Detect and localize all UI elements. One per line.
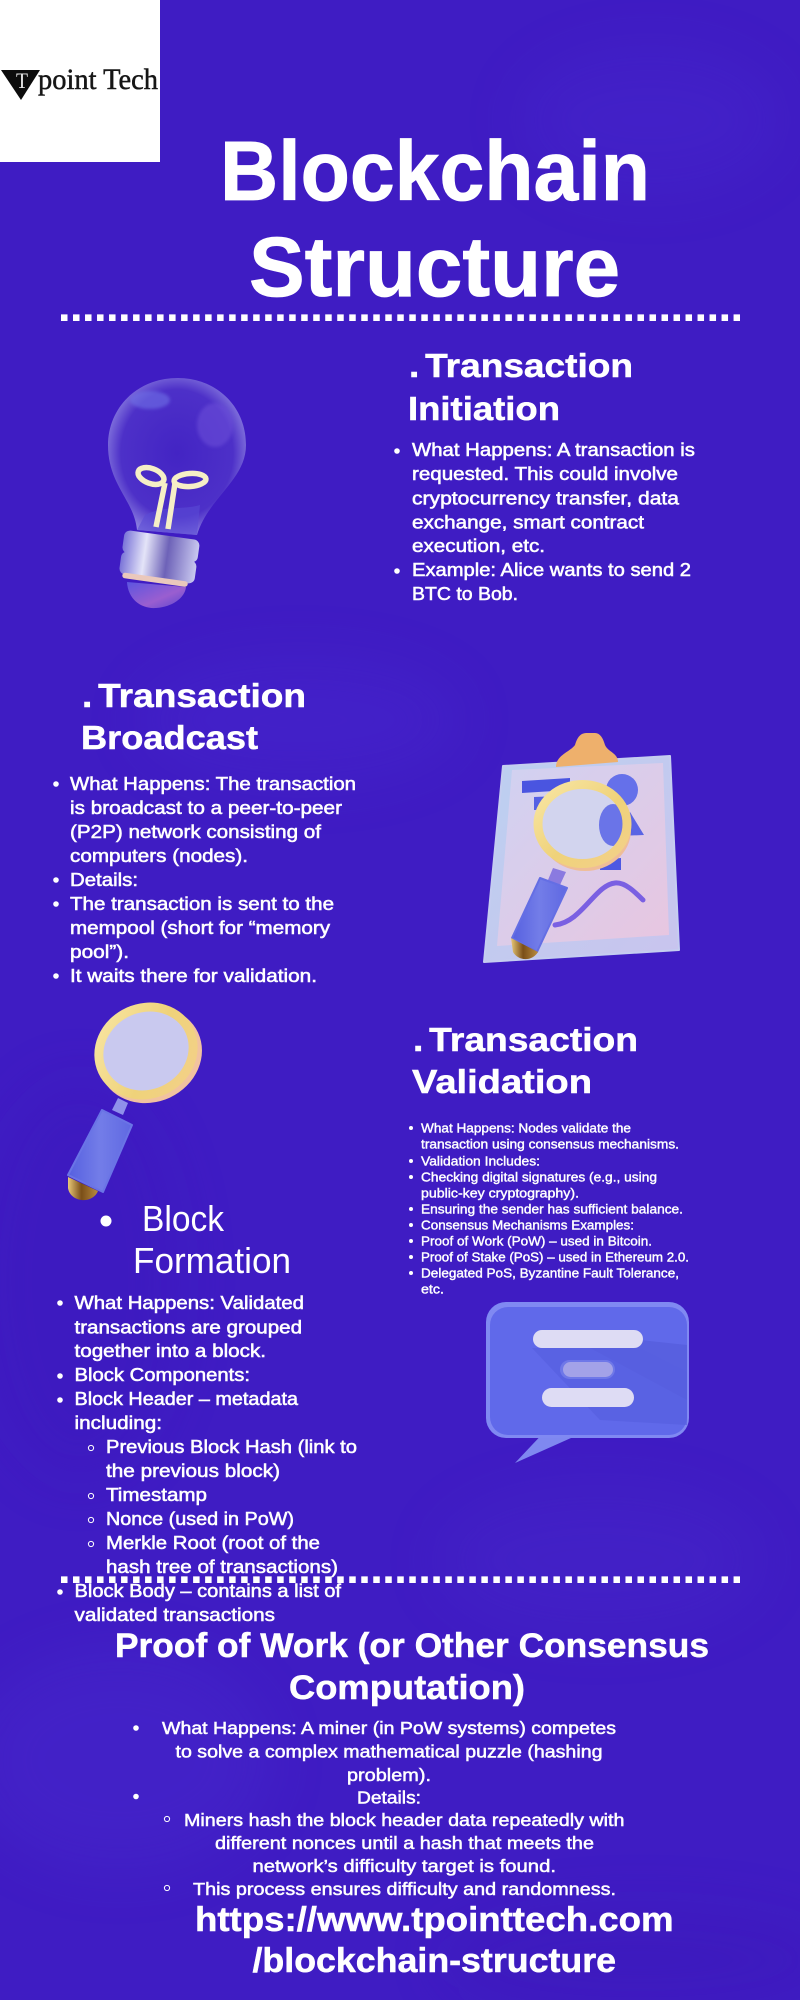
source url: /blockchain-structure (252, 1942, 616, 1980)
bullet list: BTC to Bob. (412, 583, 518, 604)
source url (195, 1901, 674, 1980)
heading: Proof of Work (or Other Consensus (115, 1627, 709, 1665)
bullet list: requested. This could involve (412, 463, 678, 484)
bullet list: The transaction is sent to the (70, 893, 334, 914)
bullet list: problem). (347, 1765, 431, 1785)
bullet list: Delegated PoS, Byzantine Fault Tolerance, (421, 1266, 679, 1280)
panel: proof of work (115, 1627, 709, 1899)
bullet list (133, 1718, 624, 1899)
title: Structure (249, 220, 620, 314)
panel: block formation (57, 1198, 357, 1625)
heading: Broadcast (81, 719, 258, 756)
bullet list: What Happens: Nodes validate the (421, 1120, 631, 1136)
bullet list: Details: (357, 1788, 421, 1808)
panel: transaction validation (409, 1021, 689, 1296)
heading (100, 1198, 291, 1281)
bullet list: Block Header – metadata (74, 1388, 299, 1409)
panel: transaction initiation (394, 347, 695, 604)
heading: Formation (133, 1240, 291, 1281)
heading: . Transaction (413, 1021, 638, 1058)
bullet list: What Happens: The transaction (70, 773, 356, 794)
bullet list: including: (74, 1412, 162, 1433)
source url: https://www.tpointtech.com (195, 1901, 674, 1939)
icon: clipboard with magnifier (484, 733, 679, 962)
bullet list: Timestamp (106, 1484, 207, 1505)
bullet list: Checking digital signatures (e.g., using (421, 1170, 657, 1184)
icon: T triangle: T (16, 68, 28, 93)
bullet list: Block Components: (74, 1364, 250, 1385)
logo: point Tech (38, 63, 158, 96)
bullet list: mempool (short for “memory (70, 917, 331, 938)
bullet list (394, 439, 695, 604)
bullet list: Miners hash the block header data repeatedly with (184, 1810, 624, 1830)
bullet list: What Happens: A miner (in PoW systems) competes (162, 1718, 616, 1738)
bullet list (53, 773, 356, 986)
bullet list: network’s difficulty target is found. (252, 1856, 556, 1876)
bullet list: is broadcast to a peer-to-peer (70, 797, 342, 818)
bullet list: Example: Alice wants to send 2 (412, 559, 691, 580)
bullet list (57, 1292, 357, 1625)
bullet list: Details: (70, 869, 138, 890)
bullet list: Ensuring the sender has sufficient balance. (421, 1202, 683, 1216)
heading: Block (142, 1198, 225, 1239)
bullet list: Proof of Stake (PoS) – used in Ethereum 2.0. (421, 1250, 689, 1264)
icon: speech bubble (486, 1302, 689, 1463)
bullet list: Consensus Mechanisms Examples: (421, 1218, 634, 1232)
bullet list: transaction using consensus mechanisms. (421, 1136, 679, 1152)
bullet list: Merkle Root (root of the (106, 1532, 320, 1553)
bullet list: What Happens: A transaction is (412, 439, 695, 460)
bullet list: the previous block) (106, 1460, 280, 1481)
title (220, 124, 650, 314)
bullet list: transactions are grouped (74, 1316, 302, 1338)
bullet list: hash tree of transactions) (106, 1556, 338, 1577)
bullet list: It waits there for validation. (70, 965, 317, 986)
bullet list: different nonces until a hash that meets the (215, 1833, 594, 1853)
icon: T triangle (1, 68, 40, 100)
heading (81, 677, 306, 756)
bullet list: exchange, smart contract (412, 512, 644, 532)
heading: . Transaction (409, 347, 633, 384)
bullet list: computers (nodes). (70, 845, 248, 866)
heading: . Transaction (82, 677, 306, 714)
icon: light bulb (108, 378, 246, 608)
bullet list: validated transactions (74, 1604, 275, 1625)
heading (115, 1627, 709, 1707)
title: Blockchain (220, 124, 650, 218)
heading: Computation) (289, 1669, 525, 1707)
bullet list: execution, etc. (412, 535, 545, 556)
heading: Validation (412, 1063, 592, 1100)
bullet list: Previous Block Hash (link to (106, 1436, 357, 1457)
bullet list: Proof of Work (PoW) – used in Bitcoin. (421, 1234, 652, 1248)
bullet list: cryptocurrency transfer, data (412, 488, 680, 508)
bullet list: (P2P) network consisting of (70, 821, 322, 842)
bullet list: pool”). (70, 941, 129, 962)
panel: transaction broadcast (53, 677, 356, 986)
heading (412, 1021, 638, 1100)
bullet list: to solve a complex mathematical puzzle (hashing (176, 1742, 602, 1762)
bullet list: What Happens: Validated (74, 1292, 304, 1313)
bullet list: Block Body – contains a list of (74, 1580, 342, 1601)
bullet list (409, 1120, 689, 1296)
heading (408, 347, 633, 427)
bullet list: This process ensures difficulty and randomness. (193, 1879, 616, 1899)
logo (0, 0, 160, 162)
icon: magnifying glass (68, 990, 218, 1200)
bullet list: etc. (421, 1282, 444, 1296)
bullet list: public-key cryptography). (421, 1186, 579, 1200)
bullet list: Nonce (used in PoW) (106, 1508, 294, 1529)
bullet list: together into a block. (74, 1340, 266, 1361)
heading: Initiation (408, 390, 560, 427)
bullet list: Validation Includes: (421, 1154, 540, 1168)
